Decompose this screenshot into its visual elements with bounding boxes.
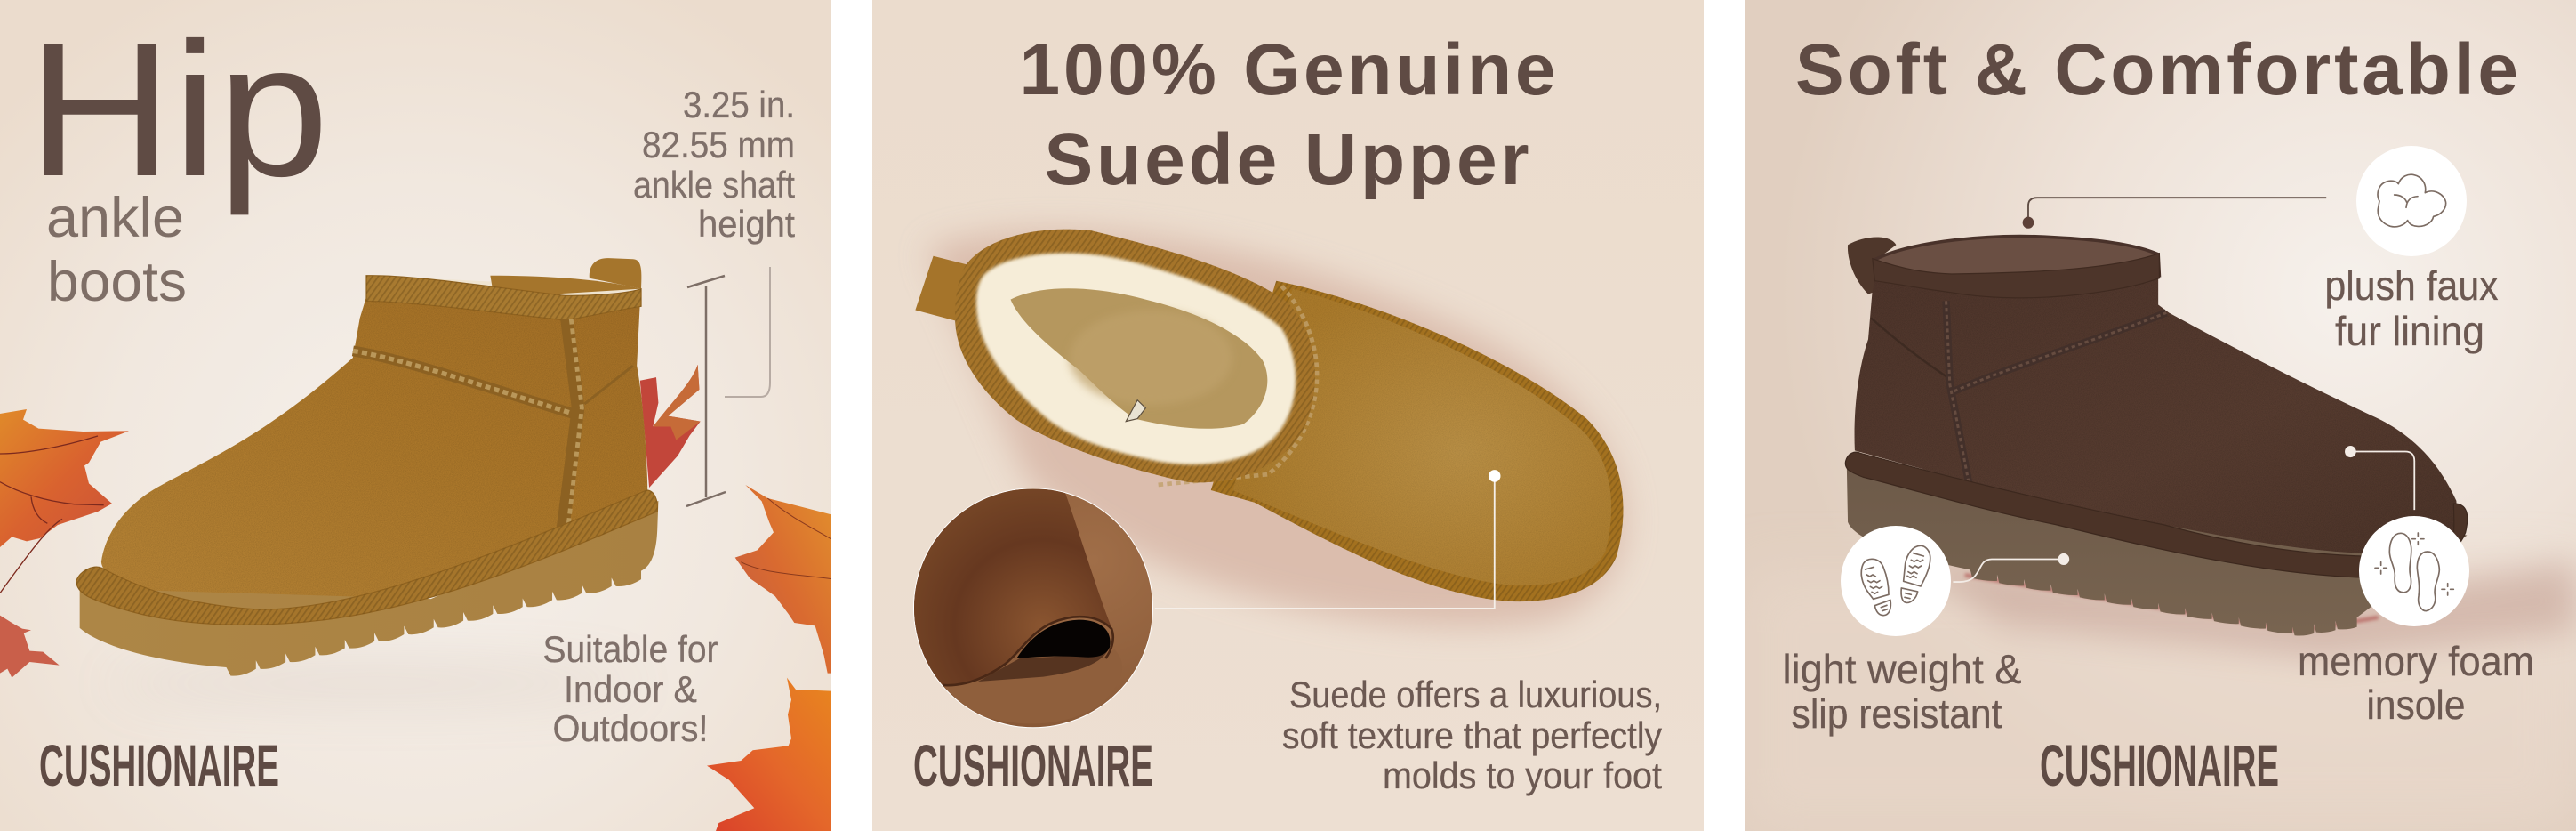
panel: hip ankle boots: [0, 0, 831, 831]
boot label tag: [1126, 400, 1145, 422]
boot upper: [101, 297, 647, 614]
title: Soft & Comfortable: [1795, 29, 2518, 110]
text: shaft height: ankle shaft: [633, 164, 795, 206]
callout: memory foam: [2345, 446, 2414, 510]
boot interior: [1011, 288, 1267, 429]
text: suitable: Suitable for: [542, 628, 718, 670]
text: light weight slip resistant: [1782, 646, 2022, 737]
boot shadow: [927, 230, 1625, 627]
boot fur ring: [976, 253, 1296, 464]
title: Suede Upper: [1044, 119, 1529, 200]
boot collar: [955, 230, 1315, 482]
logo: CUSHIONAIRE: [913, 732, 1153, 798]
boot red shadow line: [1965, 575, 2379, 631]
title: 100% Genuine: [1019, 29, 1556, 110]
boot welt: [1845, 452, 2468, 577]
boot upper: [1855, 260, 2459, 553]
boot seams: [353, 351, 572, 414]
text: memory foam insole: memory foam: [2298, 638, 2534, 684]
text: suede description: [1282, 674, 1662, 796]
boot seams: [1946, 301, 2166, 490]
boot shadow: [270, 669, 477, 695]
floor tint: [1745, 569, 2576, 831]
boot sole: [1847, 466, 2467, 636]
text: shaft height: height: [698, 203, 795, 245]
boot: top view tan: [915, 230, 1624, 601]
leaf: left bottom: [0, 616, 60, 678]
boot sole: [80, 501, 658, 676]
callout: sole: [1953, 553, 2069, 582]
icon: cotton: [2356, 146, 2467, 256]
boot tab: [915, 256, 968, 320]
text: plush faux fur lining: fur lining: [2335, 308, 2484, 354]
boot welt: [76, 490, 657, 625]
leaf: right top: [735, 485, 831, 674]
subtitle: ankle boots: [48, 196, 185, 301]
callout: fur lining: [2023, 198, 2326, 229]
text: suitable: [544, 634, 718, 742]
subtitle: ankle boots: boots: [47, 251, 187, 313]
text: shaft height: [633, 84, 795, 245]
boot collar: [366, 276, 641, 320]
boot vamp rim: [1211, 281, 1624, 601]
boot back inner rim: [490, 276, 641, 294]
icon: memory foam insoles: [2359, 516, 2469, 626]
text: suede description: soft texture that perfectly: [1282, 714, 1662, 756]
icon: shoe prints: [1841, 526, 1951, 636]
text: suitable: Outdoors!: [553, 707, 708, 749]
text: memory foam insole: [2298, 638, 2534, 728]
text: suede description: Suede offers a luxurious,: [1289, 674, 1662, 715]
boot: brown three quarter: [1845, 237, 2468, 636]
text: suede description: molds to your foot: [1383, 754, 1662, 796]
boot collar: [1873, 254, 2159, 298]
logo: CUSHIONAIRE: [39, 732, 279, 798]
logo: CUSHIONAIRE: [2040, 732, 2279, 798]
boot vamp suede: [1232, 289, 1611, 585]
boot seam: [1157, 286, 1317, 485]
text: plush faux fur lining: [2324, 262, 2499, 354]
text: plush faux fur lining: plush faux: [2324, 262, 2499, 309]
leaf: right bottom: [707, 678, 831, 831]
callout line: [1155, 470, 1500, 609]
boot tab: [1848, 237, 1896, 294]
boot fur opening: [434, 279, 637, 295]
swatch: suede detail: [913, 488, 1153, 728]
text: suitable: Indoor &: [564, 668, 697, 710]
measure: bracket: [725, 267, 770, 397]
subtitle: ankle boots: ankle: [46, 187, 184, 249]
panel: soft and comfortable: [1745, 0, 2576, 831]
leaf: behind boot: [640, 365, 701, 488]
text: light weight slip resistant: slip resistant: [1791, 690, 2002, 737]
title: [1019, 29, 1556, 200]
leaf: left top: [0, 409, 129, 593]
panel: genuine suede upper: [872, 0, 1704, 831]
title: Hip: Hip: [28, 4, 329, 216]
boot shadow: [1895, 552, 2576, 658]
boot fur inside: [1874, 237, 2159, 281]
measure: height bar: [686, 276, 726, 506]
text: shaft height: 82.55 mm: [642, 124, 795, 165]
text: light weight slip resistant: light weight &: [1782, 646, 2022, 692]
text: shaft height: 3.25 in.: [683, 84, 795, 125]
text: memory foam insole: insole: [2367, 682, 2465, 728]
boot: side view tan: [76, 258, 658, 676]
boot pull tab: [590, 258, 641, 289]
